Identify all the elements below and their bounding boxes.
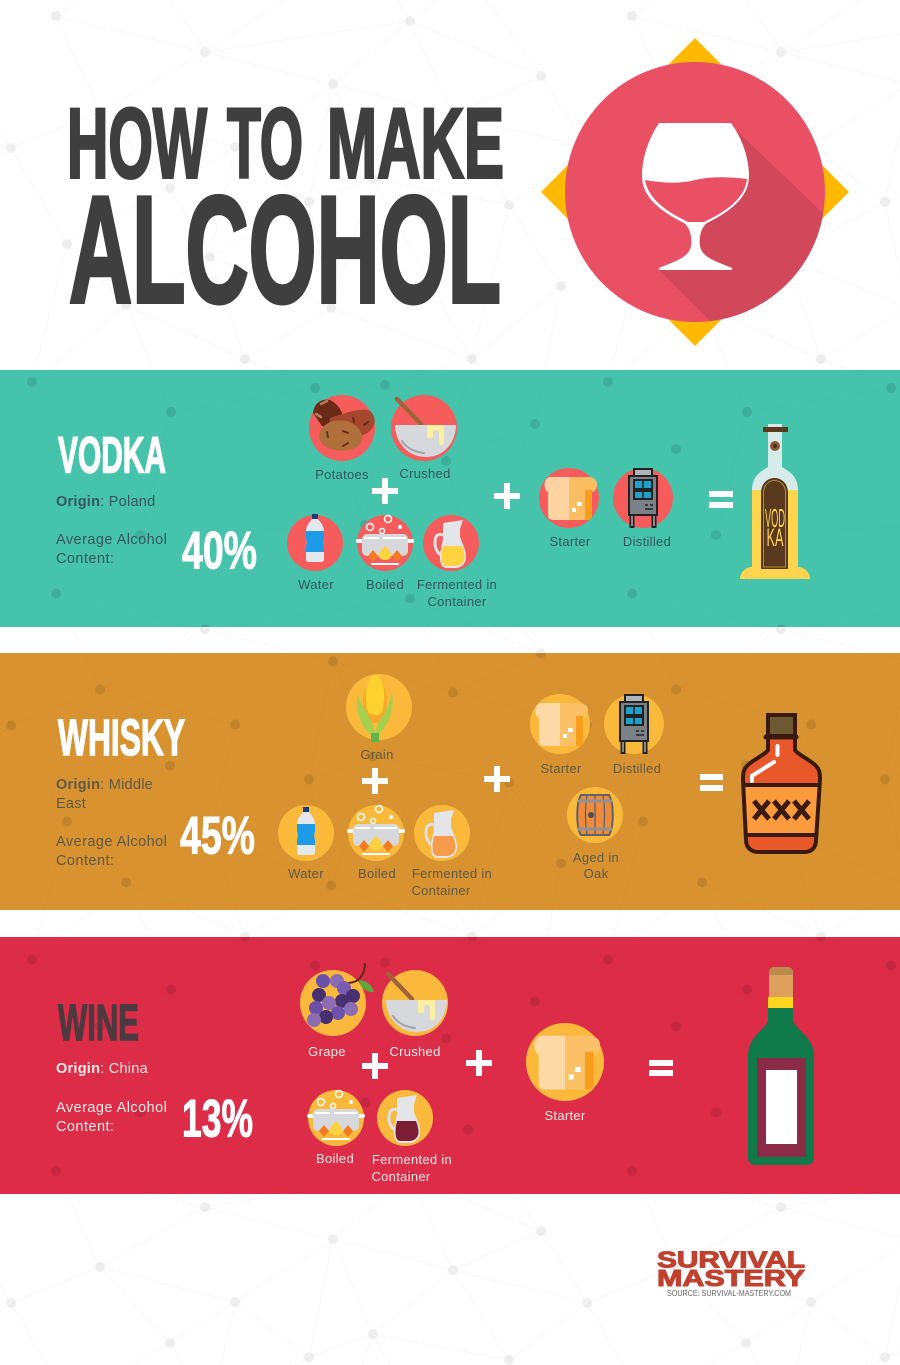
origin text: Origin: China <box>56 1061 149 1077</box>
ingredient: grape <box>300 963 374 1059</box>
ingredient: aged in oak: Oak <box>584 866 609 881</box>
title line: how to make: MAKE <box>327 88 504 198</box>
ingredient: fermented in container: Fermented in <box>372 1152 452 1167</box>
plus sign <box>466 1050 492 1076</box>
equals sign <box>649 1060 673 1076</box>
ingredient: distilled <box>604 694 664 776</box>
ingredient: starter <box>539 468 599 549</box>
stat: 45%: 45% <box>180 806 255 866</box>
title <box>67 88 504 335</box>
ingredient: fermented in container <box>417 515 497 609</box>
icon: wine bottle <box>748 967 814 1165</box>
ingredient: boiled <box>357 515 413 592</box>
origin text: Origin: Poland <box>56 494 155 510</box>
ingredient: water <box>278 805 334 881</box>
title line: how to make: HOW <box>67 88 207 198</box>
icon: vodka bottle: KA <box>766 524 784 552</box>
logo wordmark: MASTERY <box>657 1265 805 1291</box>
plus sign <box>362 768 388 794</box>
ingredient: boiled: Boiled <box>316 1151 354 1166</box>
panel: wine <box>0 937 900 1194</box>
ingredient: aged in oak: Aged in <box>573 850 619 865</box>
ingredient: boiled <box>308 1090 364 1166</box>
heading: whisky: WHISKY <box>58 709 185 766</box>
ingredient: crushed <box>391 395 457 481</box>
ingredient: fermented in container <box>371 1090 452 1184</box>
plus sign <box>372 478 398 504</box>
equals sign <box>709 491 733 508</box>
panel: whisky <box>0 653 900 910</box>
ingredient: fermented in container: Fermented in <box>412 866 492 881</box>
alcohol content label: Content: <box>56 1119 114 1135</box>
ingredient: starter: Starter <box>544 1108 586 1123</box>
ingredient: fermented in container: Fermented in <box>417 577 497 592</box>
logo wordmark <box>657 1246 805 1291</box>
stat: 40%: 40% <box>182 522 257 580</box>
ingredient: boiled: Boiled <box>358 866 396 881</box>
stat: 13%: 13% <box>182 1090 253 1148</box>
icon: vodka bottle: VOD <box>765 503 785 533</box>
ingredient: starter <box>530 694 590 776</box>
ingredient: fermented in container <box>411 805 492 898</box>
origin text: Origin: Middle <box>56 777 153 793</box>
alcohol content label: Content: <box>56 853 114 869</box>
logo wordmark: SURVIVAL <box>657 1246 805 1272</box>
icon: vodka bottle <box>740 424 810 579</box>
ingredient: distilled <box>613 468 673 549</box>
icon: whisky bottle <box>743 715 820 852</box>
ingredient: starter <box>526 1023 604 1123</box>
ingredient: fermented in container: Container <box>371 1169 431 1184</box>
ingredient: potatoes: Potatoes <box>315 467 369 482</box>
logo: survival mastery <box>657 1246 805 1298</box>
title line: alcohol: ALCOHOL <box>69 165 501 335</box>
ingredient: grape: Grape <box>308 1044 346 1059</box>
equals sign <box>700 774 723 791</box>
alcohol content label: Average Alcohol <box>56 532 167 548</box>
ingredient: boiled <box>348 805 404 881</box>
plus sign <box>362 1053 388 1079</box>
heading: wine: WINE <box>58 994 139 1051</box>
ingredient: starter: Starter <box>549 534 591 549</box>
heading: vodka: VODKA <box>58 426 166 484</box>
ingredient: water: Water <box>298 577 334 592</box>
ingredient: fermented in container: Container <box>411 883 471 898</box>
ingredient: crushed: Crushed <box>389 1044 441 1059</box>
ingredient: crushed: Crushed <box>399 466 451 481</box>
ingredient: potatoes <box>309 395 375 482</box>
ingredient: fermented in container: Container <box>427 594 487 609</box>
ingredient: water <box>287 514 343 592</box>
ingredient: aged in oak <box>567 787 623 881</box>
icon: wine glass badge <box>541 38 849 346</box>
ingredient: distilled: Distilled <box>623 534 671 549</box>
origin text: East <box>56 796 86 812</box>
title line: how to make <box>67 88 504 198</box>
ingredient: crushed <box>382 970 448 1059</box>
source line: SOURCE: SURVIVAL-MASTERY.COM <box>667 1289 791 1298</box>
ingredient: water: Water <box>288 866 324 881</box>
alcohol content label: Average Alcohol <box>56 1100 167 1116</box>
ingredient: grain: Grain <box>360 747 394 762</box>
panel: vodka <box>0 370 900 627</box>
title line: how to make: TO <box>227 88 303 198</box>
alcohol content label: Average Alcohol <box>56 834 167 850</box>
plus sign <box>484 766 510 792</box>
ingredient: boiled: Boiled <box>366 577 404 592</box>
alcohol content label: Content: <box>56 551 114 567</box>
ingredient: grain <box>346 674 412 762</box>
ingredient: starter: Starter <box>540 761 582 776</box>
plus sign <box>494 483 520 509</box>
ingredient: distilled: Distilled <box>613 761 661 776</box>
